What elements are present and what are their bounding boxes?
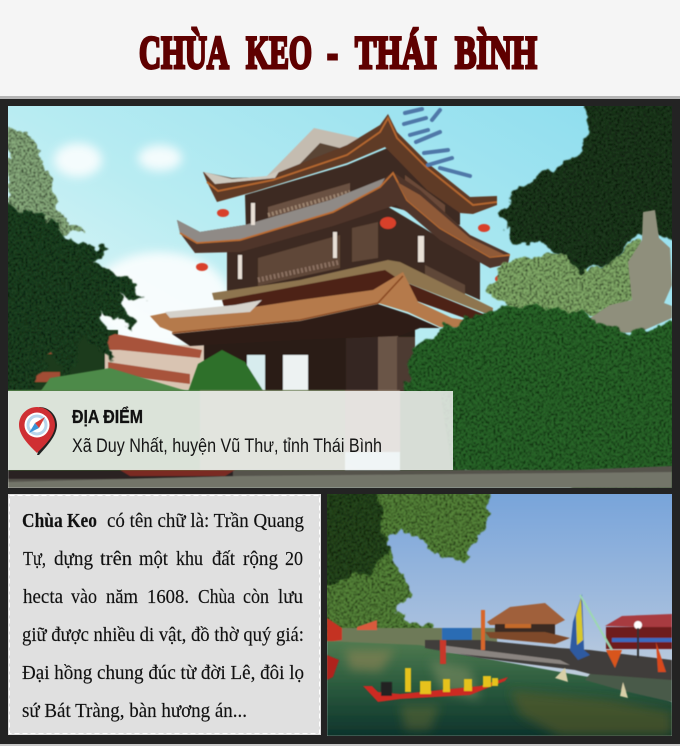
description paragraph: đất [212,548,235,570]
location caption bar [8,391,453,470]
title: CHÙA [139,27,229,79]
description paragraph: lưu [278,586,303,608]
description paragraph: vào [71,586,97,608]
description paragraph: Đại hồng chung đúc từ đời Lê, đôi lọ [22,662,304,684]
title: BÌNH [455,27,537,79]
balcony ledge [212,260,493,316]
white banners [238,203,424,279]
ground [8,466,672,483]
crowd on the bank [425,640,672,682]
description paragraph: trên [100,548,132,570]
lower-right big tree [405,305,680,500]
description paragraph: dựng [54,548,93,570]
title: KEO [246,27,312,79]
top roof [203,114,497,214]
top-right dark tree [498,100,680,272]
title: THÁI [355,27,437,79]
description paragraph: năm [106,586,138,608]
pagoda building [485,603,570,644]
left red flags on water edge [327,655,339,680]
large lower roof [150,272,494,333]
reflections [345,650,672,736]
red lanterns [196,209,507,283]
water [327,641,672,736]
bush before tower [188,350,264,392]
description paragraph: Chùa [198,586,235,608]
blue leaf sprig [404,109,470,176]
description paragraph: một [139,548,168,570]
description paragraph: có tên chữ là: Trần Quang [107,510,304,532]
description paragraph: hecta [23,586,63,608]
description paragraph: giữ được nhiều di vật, đồ thờ quý giá: [22,624,304,646]
panel: description text [8,494,321,735]
tower columns and lower body [204,330,415,392]
light band edge [0,96,680,99]
main photo: Keo pagoda tower [0,100,680,500]
right pavilion [605,614,672,658]
bank wall [585,674,672,702]
location heading: ĐỊA ĐIỂM [72,406,143,427]
dragon boat with rowers [363,668,508,702]
stone lantern [584,210,672,334]
location address: Xã Duy Nhất, huyện Vũ Thư, tỉnh Thái Bình [72,436,382,457]
description paragraph: 1608. [147,586,189,608]
light tree mid-right [485,238,640,316]
middle roof [177,172,510,268]
description paragraph: Tự, [23,548,46,570]
background temple roofs [8,329,204,391]
description paragraph: 20 [285,548,303,570]
left tree [0,128,190,395]
tree canopy top-left [320,490,490,645]
description paragraph: còn [243,586,269,608]
festival flags [570,594,590,660]
tier 1 body [245,147,460,232]
title: - [327,27,338,79]
description paragraph: Chùa Keo [22,510,97,532]
photo: boat festival on the pagoda pond [320,490,672,736]
tier 2 body [227,205,480,300]
description paragraph: khu [176,548,203,570]
icon: map pin with compass [19,407,57,455]
title [139,27,537,79]
foreground garden under caption [8,390,672,488]
description paragraph: sứ Bát Tràng, bàn hương án... [22,700,247,722]
bottom page edge [0,744,680,746]
description paragraph: rộng [243,548,278,570]
far shoreline [327,628,497,648]
tower roof gable [267,128,358,176]
description paragraph [22,510,304,722]
